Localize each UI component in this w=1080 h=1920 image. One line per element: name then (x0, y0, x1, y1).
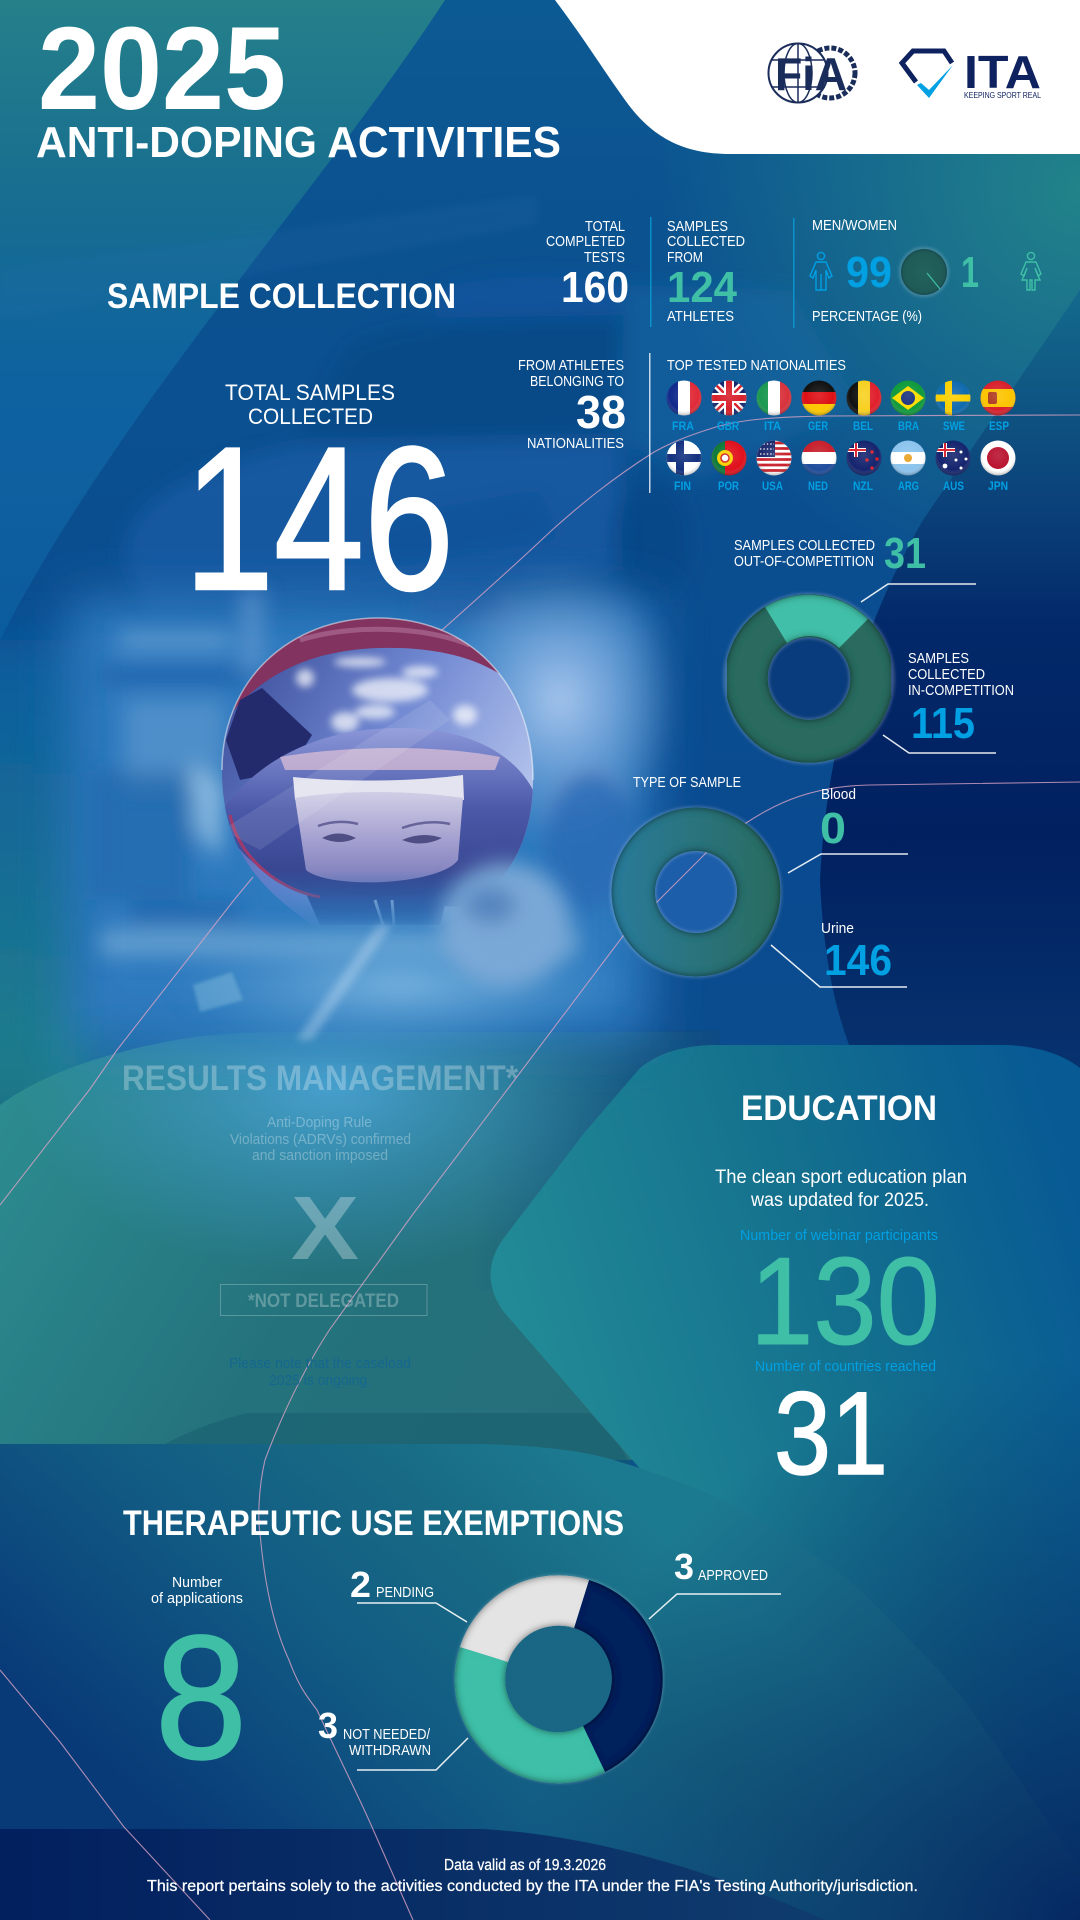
flag: Spain (980, 380, 1016, 433)
stat: men women percentage: PERCENTAGE (%) (812, 308, 922, 325)
panel: footer band (0, 1829, 826, 1920)
flag: Portugal: POR (718, 479, 739, 493)
not delegated box (220, 1284, 427, 1316)
heading: sample collection: SAMPLE COLLECTION (107, 277, 456, 316)
X mark: X (291, 1179, 359, 1279)
flag: Japan: JPN (988, 479, 1008, 493)
number of applications: Number (172, 1574, 222, 1591)
stat: men women percentage: MEN/WOMEN (812, 217, 897, 234)
panel: therapeutic use exemptions background (0, 1444, 1080, 1920)
label: in-competition: IN-COMPETITION (908, 682, 1014, 699)
flag: Brazil (890, 380, 926, 433)
footer text (147, 1857, 918, 1895)
heading: EDUCATION (741, 1089, 937, 1128)
note: Please note that the caseload (229, 1355, 411, 1372)
flag: New Zealand (846, 440, 882, 493)
note (229, 1355, 411, 1389)
label: approved: 3 (674, 1546, 694, 1587)
logo: FIA: FiA (775, 48, 847, 100)
flag: Germany (801, 380, 837, 433)
flag: Finland (666, 440, 702, 493)
dark arc band (0, 1413, 640, 1607)
divider (650, 217, 652, 327)
webinar participants: 130 (750, 1233, 940, 1371)
countries reached: Number of countries reached (755, 1358, 936, 1375)
label: pending: PENDING (376, 1584, 434, 1601)
logo: ITA: KEEPING SPORT REAL (964, 90, 1041, 100)
panel: results management (122, 1059, 518, 1389)
subtitle: ANTI-DOPING ACTIVITIES (36, 118, 561, 167)
flag: Netherlands (801, 440, 837, 493)
stat: nationalities (518, 357, 626, 452)
flag: Argentina (890, 440, 926, 493)
flag: Spain: ESP (989, 419, 1009, 433)
right fade of results panel (470, 1030, 720, 1290)
results panel light wash (20, 895, 640, 1275)
panel: top tested nationalities (666, 357, 1016, 493)
flag: Brazil: BRA (898, 419, 919, 433)
total samples collected: TOTAL SAMPLES (225, 380, 395, 405)
countries reached: 31 (774, 1368, 888, 1500)
description: and sanction imposed (252, 1147, 388, 1164)
flag: Belgium: BEL (853, 419, 873, 433)
label: in-competition (883, 650, 1014, 753)
stat: samples collected from athletes (667, 218, 745, 325)
stat: nationalities: 38 (576, 386, 626, 438)
label: urine: Urine (821, 920, 854, 937)
flag: Germany: GER (808, 419, 828, 433)
flag: Italy (756, 380, 792, 433)
description (230, 1114, 411, 1164)
number of applications: of applications (151, 1590, 243, 1607)
label: out-of-competition: OUT-OF-COMPETITION (734, 553, 874, 570)
lens flare streak (296, 925, 392, 1040)
label: not needed withdrawn (318, 1705, 468, 1770)
not delegated box: *NOT DELEGATED (248, 1291, 399, 1312)
label: in-competition: 115 (911, 699, 975, 748)
stat: total completed tests: COMPLETED (546, 233, 625, 250)
description (715, 1167, 967, 1211)
label: not needed withdrawn: WITHDRAWN (349, 1742, 431, 1759)
stat: total completed tests (546, 218, 629, 312)
heading: THERAPEUTIC USE EXEMPTIONS (123, 1504, 624, 1543)
heading: RESULTS MANAGEMENT* (122, 1059, 518, 1098)
flag: France (666, 380, 702, 433)
flag: Argentina: ARG (898, 479, 919, 493)
flag: Japan (980, 440, 1016, 493)
footer text: Data valid as of 19.3.2026 (444, 1857, 606, 1874)
donut holes (654, 636, 851, 934)
year: 2025 (38, 3, 286, 135)
total samples collected (184, 380, 454, 633)
label: pending: 2 (350, 1564, 371, 1605)
flag: Portugal (711, 440, 747, 493)
panel: top tested nationalities: TOP TESTED NATIONALITIES (667, 357, 846, 374)
big number 146: 146 (184, 405, 454, 633)
icon: woman (1021, 252, 1041, 290)
label: not needed withdrawn: NOT NEEDED/ (343, 1726, 431, 1743)
flag: Great Britain: GBR (717, 419, 739, 433)
label: in-competition: COLLECTED (908, 666, 985, 683)
footer text: This report pertains solely to the activities conducted by the ITA under the FIA's Testing Authority/jurisdiction. (147, 1878, 918, 1895)
label: blood: Blood (821, 786, 856, 803)
flag: Great Britain (711, 380, 747, 433)
stat: total completed tests: TOTAL (585, 218, 625, 235)
label: urine: 146 (824, 936, 892, 985)
label: type of sample: TYPE OF SAMPLE (633, 774, 741, 791)
flag: Belgium (846, 380, 882, 433)
logo: ITA (902, 46, 1041, 100)
panel: results management background (0, 1032, 720, 1460)
flag: USA (756, 440, 792, 493)
total samples collected: COLLECTED (248, 404, 373, 429)
flag: New Zealand: NZL (853, 479, 873, 493)
driver photo (70, 560, 680, 1047)
stat: samples collected from athletes: ATHLETES (667, 308, 734, 325)
stat: nationalities: FROM ATHLETES (518, 357, 624, 374)
label: out-of-competition (734, 529, 976, 602)
rally car photo (0, 195, 860, 620)
description: The clean sport education plan (715, 1167, 967, 1188)
label: approved: APPROVED (698, 1567, 768, 1584)
label: out-of-competition: SAMPLES COLLECTED (734, 537, 875, 554)
icon: man (810, 252, 832, 290)
donut chart: type of sample (611, 808, 780, 977)
icon: helmet (215, 610, 540, 930)
divider (793, 218, 794, 328)
flag: Sweden (935, 380, 971, 433)
stat: samples collected from athletes: FROM (667, 249, 703, 266)
flag: Italy: ITA (764, 419, 781, 433)
label: blood (788, 786, 908, 873)
stat: total completed tests: 160 (561, 263, 629, 312)
flag: Finland: FIN (674, 479, 691, 493)
stat: men women percentage: 99 (846, 248, 892, 297)
panel: therapeutic use exemptions (123, 1504, 781, 1796)
label: blood: 0 (820, 804, 846, 853)
lower-right darkening (520, 1360, 1080, 1920)
note: 2025 is ongoing. (269, 1372, 371, 1389)
stat: men women percentage (810, 217, 1041, 325)
stat: nationalities: BELONGING TO (530, 373, 624, 390)
pink decorative lines (0, 415, 1080, 1920)
webinar participants: Number of webinar participants (740, 1227, 938, 1244)
flag: Netherlands: NED (808, 479, 828, 493)
header white tab (555, 0, 1080, 154)
stat: samples collected from athletes: 124 (667, 263, 737, 312)
flag: USA: USA (762, 479, 783, 493)
icon: gloved hand (440, 863, 570, 987)
flag: France: FRA (672, 419, 694, 433)
label: out-of-competition: 31 (884, 529, 926, 578)
description: was updated for 2025. (750, 1190, 929, 1211)
label: in-competition: SAMPLES (908, 650, 969, 667)
label: approved (649, 1546, 781, 1619)
panel: education background (490, 1045, 1080, 1920)
stat: samples collected from athletes: COLLECTED (667, 233, 745, 250)
divider (649, 353, 650, 493)
countries reached (755, 1358, 936, 1500)
flag: Australia: AUS (943, 479, 964, 493)
description: Anti-Doping Rule (267, 1114, 372, 1131)
panel: education (715, 1089, 967, 1500)
label: pending (350, 1564, 467, 1622)
donut chart: TUE status (454, 1574, 664, 1784)
number of applications: 8 (155, 1600, 247, 1796)
donut chart: in and out of competition (746, 595, 872, 741)
logo: ITA: ITA (964, 46, 1041, 98)
stat: samples collected from athletes: SAMPLES (667, 218, 728, 235)
stat: men women percentage: 1 (961, 248, 979, 297)
stat: nationalities: NATIONALITIES (527, 435, 624, 452)
flag: Sweden: SWE (943, 419, 965, 433)
title (36, 3, 561, 167)
stat: total completed tests: TESTS (584, 249, 625, 266)
description: Violations (ADRVs) confirmed (230, 1131, 411, 1148)
pie: men women (899, 247, 949, 297)
label: not needed withdrawn: 3 (318, 1705, 338, 1746)
label: urine (771, 920, 907, 987)
flag: Australia (935, 440, 971, 493)
